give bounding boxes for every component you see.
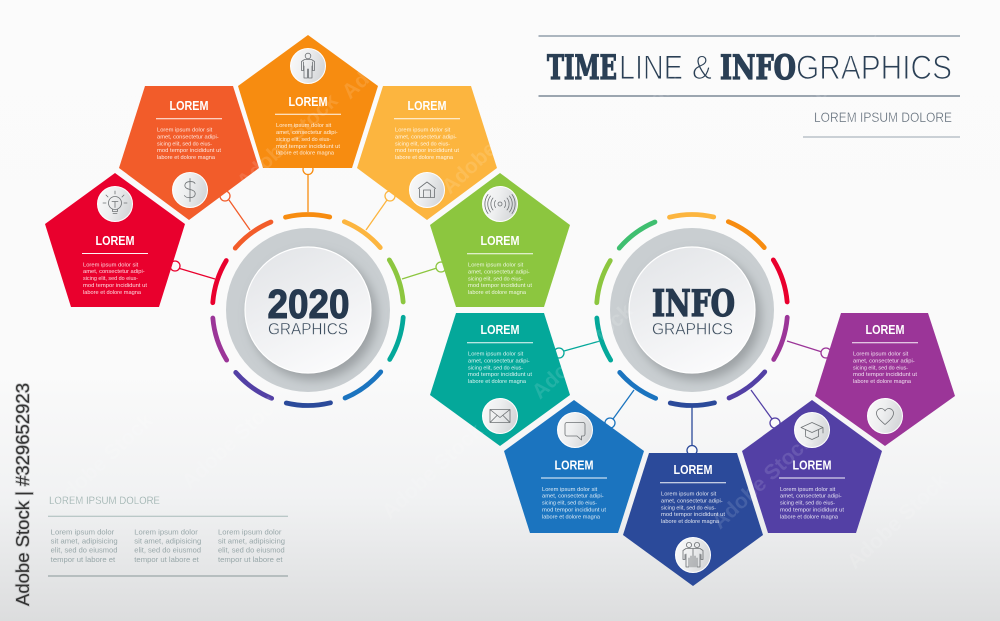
hub label: INFO: INFO [652,282,735,325]
title: TIMELINE & INFOGRAPHICS: INFO [720,48,796,88]
notes column 3: Lorem ipsum dolor [218,528,282,536]
text: blue panel copy [541,458,607,520]
text: yellow panel copy [394,99,460,161]
panel: blue pentagon [504,400,644,533]
text: blue panel copy: sicing elit, sed do eius- [542,501,597,507]
watermark text: Adobe Stock [528,299,638,404]
text: orange-red panel copy: LOREM [170,99,208,113]
watermark text: Adobe Stock [578,69,688,174]
text: purple panel copy [779,458,845,520]
panel: magenta pentagon [815,313,955,446]
text: navy panel copy: LOREM [674,463,712,477]
notes column 1: Lorem ipsum dolor [51,528,115,536]
text: navy panel copy: sicing elit, sed do eius- [661,505,716,511]
icon: two people [676,538,710,572]
icon: envelope [482,398,518,434]
text: blue panel copy: labore et dolore magna [542,514,601,520]
text: green panel copy: mod tempor incididunt ut [468,283,532,289]
text: yellow panel copy: Lorem ipsum dolor sit [395,127,451,133]
watermark text: Adobe Stock [178,389,288,494]
text: green panel copy: labore et dolore magna [468,290,527,296]
segmented ring: info [557,175,827,445]
text: red panel copy: Lorem ipsum dolor sit [83,262,139,268]
watermark text: Adobe Stock [38,76,148,181]
text: magenta panel copy: amet, consectetur adipi- [853,358,915,364]
panel: orange pentagon [238,35,378,168]
title: TIMELINE & INFOGRAPHICS [547,48,952,88]
text: orange-red panel copy: Lorem ipsum dolor sit [157,127,213,133]
text: red panel copy: labore et dolore magna [83,290,142,296]
text: orange panel copy: Lorem ipsum dolor sit [276,123,332,129]
notes column 2: tempor ut labore et [134,555,199,564]
text: blue panel copy: amet, consectetur adipi- [542,494,604,500]
watermark text: Adobe Stock [378,419,488,524]
hub label: 2020: 2020 [268,281,350,327]
hub sublabel: graphics: GRAPHICS [268,319,348,338]
text: teal panel copy: Lorem ipsum dolor sit [468,352,524,358]
text: navy panel copy [660,463,726,525]
title: TIMELINE & INFOGRAPHICS: GRAPHICS [796,49,952,87]
text: orange panel copy: labore et dolore magna [276,151,335,157]
title block [538,36,960,137]
notes column 1 [51,528,118,564]
connectors: info hub [554,341,831,456]
text: teal panel copy: mod tempor incididunt ut [468,372,532,378]
text: green panel copy: LOREM [480,234,520,248]
text: purple panel copy: amet, consectetur adipi- [780,494,842,500]
panel: navy pentagon [623,453,763,586]
watermark text: Adobe Stock [778,29,888,134]
text: blue panel copy: LOREM [554,458,594,472]
text: purple panel copy: mod tempor incididunt ut [780,508,844,514]
text: purple panel copy: LOREM [792,458,832,472]
notes column 3: tempor ut labore et [218,555,282,564]
text: orange panel copy: sicing elit, sed do eius- [276,137,331,143]
icon: signal [482,186,518,222]
side credit text: Adobe Stock | #329652923 [13,383,33,606]
text: orange panel copy: LOREM [288,95,328,109]
text: teal panel copy: labore et dolore magna [468,379,527,385]
text: orange-red panel copy: sicing elit, sed do eius- [157,141,212,147]
text: red panel copy: LOREM [96,234,134,248]
text: purple panel copy: labore et dolore magna [780,514,839,520]
hub sublabel: graphics: GRAPHICS [652,319,733,338]
watermark text: Adobe Stock [233,89,343,194]
notes column 2: elit, sed do eiusmod [134,546,201,555]
icon: house [410,172,444,208]
notes column 3 [218,528,285,564]
text: red panel copy: amet, consectetur adipi- [83,269,145,275]
watermark text: Adobe Stock [338,0,448,104]
notes column 1: elit, sed do eiusmod [51,546,117,555]
text: yellow panel copy: labore et dolore magna [395,155,454,161]
text: green panel copy: Lorem ipsum dolor sit [468,262,524,268]
watermark text: Adobe Stock [48,409,158,514]
text: green panel copy [467,234,533,296]
watermark text: Adobe Stock [708,429,818,534]
panel: teal pentagon [430,313,570,446]
text: yellow panel copy: sicing elit, sed do eius- [395,141,450,147]
text: magenta panel copy: Lorem ipsum dolor sit [853,352,909,358]
text: teal panel copy: sicing elit, sed do eius- [468,365,523,371]
notes column 2 [134,528,201,564]
notes heading: LOREM IPSUM DOLORE [49,495,160,507]
connectors: 2020 hub [170,164,446,279]
text: orange-red panel copy: mod tempor incididunt ut [157,148,221,154]
title: TIMELINE & INFOGRAPHICS: TIME [547,48,617,88]
notes column 2: Lorem ipsum dolor [134,528,198,536]
notes column 3: sit amet, adipisicing [218,537,285,546]
icon: heart [868,398,902,434]
title: TIMELINE & INFOGRAPHICS: & [692,49,712,87]
text: navy panel copy: mod tempor incididunt ut [661,512,725,518]
text: blue panel copy: Lorem ipsum dolor sit [542,487,598,493]
segmented ring: 2020 [173,175,443,445]
text: orange-red panel copy: amet, consectetur adipi- [157,134,219,140]
text: magenta panel copy: labore et dolore magna [853,379,912,385]
panel: orange-red pentagon [119,86,259,220]
icon: dollar [172,172,208,208]
text: navy panel copy: amet, consectetur adipi- [661,498,723,504]
watermark text: Adobe Stock [438,94,548,199]
notes column 3: elit, sed do eiusmod [218,546,285,555]
icon: speech bubble [558,412,592,448]
text: orange panel copy: mod tempor incididunt ut [276,144,340,150]
panel: green pentagon [430,173,570,307]
text: orange-red panel copy [156,99,222,161]
text block: bottom left notes [48,495,288,576]
text: teal panel copy [467,323,533,385]
text: red panel copy [82,234,148,296]
text: yellow panel copy: mod tempor incididunt ut [395,148,459,154]
text: green panel copy: sicing elit, sed do eius- [468,276,523,282]
text: purple panel copy: Lorem ipsum dolor sit [780,487,836,493]
icon: graduation cap [794,412,830,448]
text: magenta panel copy: sicing elit, sed do eius- [853,365,908,371]
text: teal panel copy: LOREM [480,323,520,337]
subtitle: LOREM IPSUM DOLORE [814,110,952,125]
text: teal panel copy: amet, consectetur adipi- [468,358,530,364]
watermark text: Adobe Stock [828,139,938,244]
notes column 2: sit amet, adipisicing [134,537,201,546]
title: TIMELINE & INFOGRAPHICS: LINE [619,49,683,87]
text: magenta panel copy: LOREM [866,323,904,337]
text: yellow panel copy: amet, consectetur adipi- [395,134,457,140]
panel: purple pentagon [742,400,882,533]
text: magenta panel copy: mod tempor incididunt ut [853,372,917,378]
text: green panel copy: amet, consectetur adipi- [468,269,530,275]
panel: red pentagon [45,173,185,307]
text: navy panel copy: Lorem ipsum dolor sit [661,492,717,498]
hub: info graphics [610,228,774,392]
text: navy panel copy: labore et dolore magna [661,519,720,525]
notes column 1: tempor ut labore et [51,555,115,564]
text: orange-red panel copy: labore et dolore magna [157,155,216,161]
text: orange panel copy: amet, consectetur adipi- [276,130,338,136]
text: blue panel copy: mod tempor incididunt ut [542,508,606,514]
text: magenta panel copy [852,323,918,385]
hub: 2020 graphics [226,228,390,392]
icon: person [290,48,326,84]
text: purple panel copy: sicing elit, sed do eius- [780,501,835,507]
panel: yellow pentagon [357,86,497,220]
text: orange panel copy [275,95,341,157]
icon: light bulb [98,186,132,222]
text: red panel copy: sicing elit, sed do eius- [83,276,138,282]
text: red panel copy: mod tempor incididunt ut [83,283,147,289]
text: yellow panel copy: LOREM [408,99,446,113]
notes column 1: sit amet, adipisicing [51,537,118,546]
watermark text: Adobe Stock [843,469,953,574]
